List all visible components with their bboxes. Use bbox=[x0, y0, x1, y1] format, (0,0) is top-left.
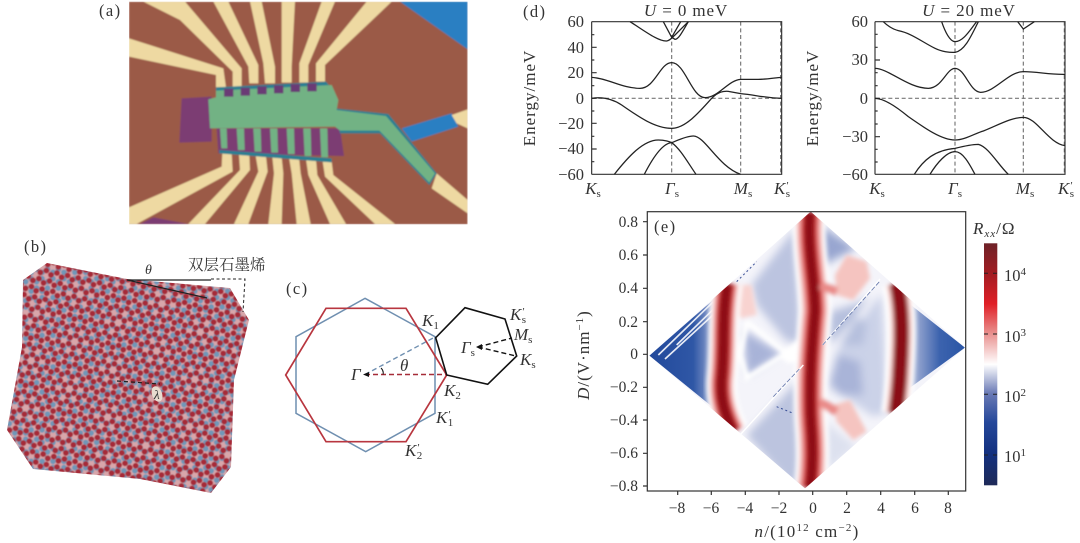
x axis title: cm bbox=[810, 522, 838, 541]
panel d right: band structure U=20 bbox=[803, 1, 1074, 200]
panel a: device micrograph bbox=[99, 1, 468, 224]
y tick labels: 0 bbox=[576, 89, 584, 108]
dashed vectors bbox=[365, 337, 516, 374]
x tick labels: s bbox=[675, 188, 679, 200]
y axis title: Energy/meV bbox=[520, 50, 539, 146]
c labels: θ bbox=[400, 356, 408, 375]
x tick labels: K bbox=[773, 179, 787, 198]
x tick labels: Γ bbox=[947, 179, 959, 198]
y axis title: Energy/meV bbox=[803, 50, 822, 146]
y axis title: D/(V·nm bbox=[574, 331, 593, 400]
y tick labels: 30 bbox=[852, 50, 868, 69]
x tick labels: −6 bbox=[703, 500, 719, 517]
x tick labels: s bbox=[881, 188, 885, 200]
c labels: s bbox=[531, 359, 536, 371]
colorbar tick labels: 10 bbox=[1004, 387, 1020, 406]
panel c: Brillouin zones bbox=[286, 279, 536, 462]
y tick labels: 40 bbox=[568, 38, 584, 57]
x tick labels: ′ bbox=[786, 180, 789, 192]
angle lines bbox=[117, 279, 245, 384]
y tick labels: 0 bbox=[860, 89, 868, 108]
y tick labels: 60 bbox=[852, 12, 868, 31]
y tick labels: 0.8 bbox=[619, 214, 638, 231]
x tick labels: s bbox=[597, 188, 601, 200]
colorbar tick labels: 4 bbox=[1020, 266, 1026, 278]
c labels: K bbox=[435, 408, 449, 427]
y tick labels bbox=[558, 12, 584, 184]
lambda label: λ bbox=[153, 387, 160, 402]
x tick labels: M bbox=[733, 179, 749, 198]
y tick labels: 0.2 bbox=[619, 314, 638, 331]
colorbar title: R bbox=[972, 219, 984, 238]
y axis title: −1 bbox=[574, 317, 586, 331]
x tick labels: s bbox=[1030, 188, 1034, 200]
x tick labels: Γ bbox=[664, 179, 676, 198]
red hexagon bbox=[286, 308, 447, 442]
x tick labels: s bbox=[958, 188, 962, 200]
y tick labels: −40 bbox=[558, 139, 584, 158]
y tick labels: 0 bbox=[630, 346, 638, 363]
x tick labels: K bbox=[584, 179, 598, 198]
c labels: M bbox=[513, 325, 529, 344]
plot frame, guides and bands bbox=[592, 22, 782, 174]
x tick labels: −8 bbox=[669, 500, 685, 517]
colorbar tick labels: 10 bbox=[1004, 327, 1020, 346]
colorbar tick labels: 2 bbox=[1020, 387, 1026, 399]
x tick labels: s bbox=[748, 188, 752, 200]
c labels: 2 bbox=[417, 450, 422, 462]
plot frame, guides and bands bbox=[875, 22, 1065, 174]
label a: (a) bbox=[99, 1, 122, 20]
colorbar tick labels: 10 bbox=[1004, 447, 1020, 466]
c labels: 1 bbox=[433, 320, 439, 332]
y tick labels bbox=[610, 214, 638, 495]
plot title: U = 0 meV bbox=[644, 1, 728, 20]
x tick labels: K bbox=[1057, 179, 1071, 198]
y tick labels: −0.6 bbox=[610, 445, 638, 462]
y tick labels: −60 bbox=[842, 165, 868, 184]
colorbar title: xx bbox=[983, 228, 996, 240]
c labels bbox=[350, 305, 536, 462]
white patch behind lambda bbox=[150, 385, 164, 403]
heatmap diamond bbox=[640, 205, 973, 495]
c labels: K bbox=[443, 381, 457, 400]
c labels: s bbox=[522, 314, 526, 326]
moire lattice atoms bbox=[7, 263, 249, 493]
x axis title: ) bbox=[853, 522, 859, 541]
c labels: Γ bbox=[350, 365, 362, 384]
label e: (e) bbox=[654, 217, 677, 236]
colorbar bbox=[984, 243, 997, 485]
plot title: U = 20 meV bbox=[922, 1, 1016, 20]
y tick labels: −30 bbox=[842, 127, 868, 146]
x tick labels: −4 bbox=[737, 500, 753, 517]
c labels: K bbox=[421, 311, 435, 330]
y tick labels: −60 bbox=[558, 165, 584, 184]
c labels: s bbox=[528, 334, 532, 346]
c labels: Γ bbox=[460, 338, 472, 357]
bilayer graphene caption: 双层石墨烯 bbox=[188, 255, 266, 274]
colorbar tick labels: 10 bbox=[1004, 266, 1020, 285]
y tick labels: 0.4 bbox=[619, 280, 638, 297]
x tick labels: 8 bbox=[944, 500, 952, 517]
x tick labels: ′ bbox=[1070, 180, 1073, 192]
x tick labels: M bbox=[1015, 179, 1031, 198]
y axis title: ) bbox=[574, 310, 593, 317]
colorbar title: /Ω bbox=[996, 219, 1016, 238]
x tick labels: 0 bbox=[809, 500, 817, 517]
y tick labels bbox=[842, 12, 868, 184]
y tick labels: −0.2 bbox=[610, 379, 638, 396]
x axis title: 12 bbox=[796, 522, 810, 534]
colorbar tick labels bbox=[1004, 266, 1026, 466]
x tick labels: s bbox=[1070, 188, 1074, 200]
c labels: ′ bbox=[448, 409, 451, 421]
x tick labels: 4 bbox=[877, 500, 885, 517]
x tick labels: s bbox=[786, 188, 790, 200]
device photograph bbox=[129, 2, 468, 224]
black mini zone hexagon bbox=[436, 308, 517, 384]
panel b: moire lattice bbox=[0, 237, 266, 500]
c labels: s bbox=[471, 347, 475, 359]
arrow heads and angle arc bbox=[363, 344, 482, 377]
colorbar tick labels: 1 bbox=[1020, 447, 1026, 459]
angle label: θ bbox=[145, 263, 152, 278]
c labels: K bbox=[519, 350, 533, 369]
colorbar tick labels: 3 bbox=[1020, 327, 1026, 339]
y tick labels: 20 bbox=[568, 63, 584, 82]
y tick labels: 60 bbox=[568, 12, 584, 31]
c labels: ′ bbox=[522, 306, 525, 318]
c labels: ′ bbox=[417, 442, 420, 454]
x tick labels: −2 bbox=[771, 500, 787, 517]
y tick labels: −20 bbox=[558, 114, 584, 133]
blue hexagon bbox=[296, 298, 435, 452]
x tick labels: 2 bbox=[843, 500, 851, 517]
panel d left: band structure U=0 bbox=[520, 1, 790, 200]
x tick labels bbox=[669, 500, 952, 517]
x tick labels bbox=[868, 179, 1074, 200]
y tick labels: 0.6 bbox=[619, 247, 638, 264]
x tick labels: K bbox=[868, 179, 882, 198]
plot frame and ticks bbox=[643, 212, 966, 495]
label c: (c) bbox=[286, 279, 309, 298]
x tick labels: 6 bbox=[911, 500, 919, 517]
label d: (d) bbox=[523, 2, 546, 21]
label b: (b) bbox=[24, 237, 47, 256]
x axis title: n/(10 bbox=[755, 522, 796, 541]
c labels: 1 bbox=[448, 417, 453, 429]
y tick labels: −0.4 bbox=[610, 412, 638, 429]
y tick labels: −0.8 bbox=[610, 478, 638, 495]
panel e: resistance map bbox=[574, 205, 1026, 541]
x axis title: −2 bbox=[838, 522, 853, 534]
c labels: 2 bbox=[455, 390, 461, 402]
c labels: K bbox=[509, 305, 523, 324]
c labels: K bbox=[404, 441, 418, 460]
x tick labels bbox=[584, 179, 790, 200]
